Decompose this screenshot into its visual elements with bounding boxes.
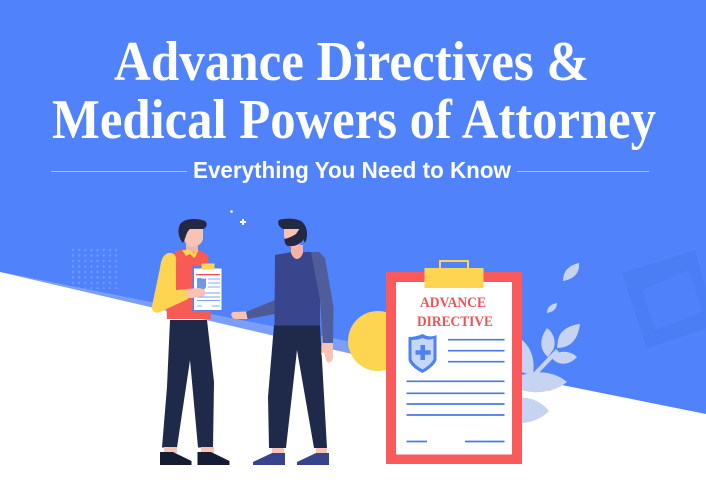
- vest: [166, 250, 211, 319]
- left arm: [246, 300, 275, 319]
- leaves plant: [515, 263, 580, 423]
- torso: [274, 252, 320, 326]
- title: [52, 31, 656, 151]
- person: bearded man: [231, 219, 334, 465]
- shoes: [160, 452, 230, 465]
- icon: shield: [408, 334, 436, 373]
- legs: [162, 320, 214, 448]
- document heading: DIRECTIVE: [417, 314, 493, 330]
- clipboard paper: [396, 282, 512, 454]
- title: Advance Directives &: [114, 31, 589, 93]
- document heading: ADVANCE: [420, 295, 486, 311]
- legs: [268, 325, 327, 448]
- sparkles: [230, 210, 246, 225]
- subtitle with rules: Everything You Need to Know: [193, 157, 511, 183]
- right sleeve: [311, 252, 334, 343]
- hand: [187, 288, 206, 298]
- document heading: [417, 295, 493, 330]
- ankles: [272, 448, 327, 454]
- right hand: [321, 343, 333, 362]
- shoes: [253, 453, 329, 465]
- white diagonal area: [0, 272, 706, 496]
- neck: [291, 245, 303, 259]
- clipboard board: [386, 272, 522, 464]
- yellow sleeve: [152, 253, 188, 313]
- clipboard clip: [424, 261, 484, 288]
- held clipboard: [192, 264, 223, 311]
- yellow circle: [348, 311, 408, 371]
- decorative dot grid: [71, 248, 120, 289]
- left hand: [231, 312, 248, 319]
- decorative square: [622, 250, 706, 348]
- neck and head: [179, 219, 207, 252]
- light band along diagonal: [0, 272, 352, 354]
- head: [278, 219, 307, 247]
- collar: [182, 250, 198, 258]
- document lines: [406, 340, 504, 442]
- title: Medical Powers of Attorney: [52, 89, 656, 151]
- person: man with clipboard: [152, 219, 230, 465]
- clipboard: advance directive: [386, 261, 522, 464]
- ankles: [164, 447, 214, 453]
